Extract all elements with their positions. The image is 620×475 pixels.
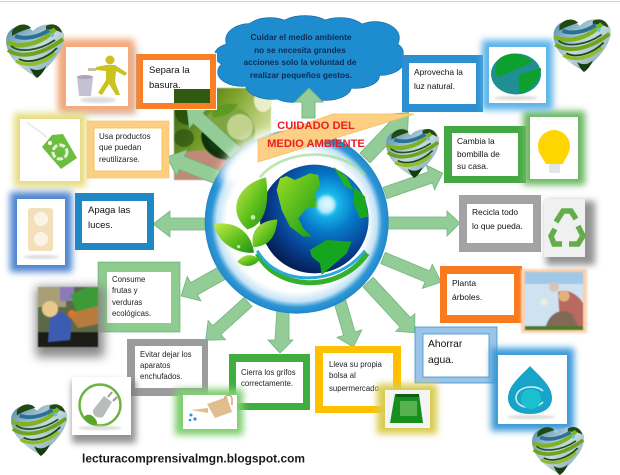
box: Evitar dejar aparatos: enchufados. bbox=[140, 372, 182, 381]
footer url: lecturacomprensivalmgn.blogspot.com bbox=[82, 452, 305, 466]
box: Cambia la bombilla: Cambia la bbox=[457, 136, 495, 146]
icon: plug bbox=[72, 377, 136, 443]
box: Cierra los grifos: correctamente. bbox=[241, 379, 293, 388]
box: Cambia la bombilla: su casa. bbox=[457, 161, 488, 171]
swoosh rings bbox=[260, 155, 365, 177]
globe bbox=[260, 165, 369, 273]
arrow to cloud bbox=[295, 88, 323, 118]
icon: shopping bag bbox=[377, 384, 437, 434]
top rule bbox=[0, 1, 620, 2]
photo: couple planting bbox=[521, 269, 587, 333]
arrow to Ahorrar agua bbox=[358, 273, 424, 342]
box: Planta arboles bbox=[440, 266, 522, 323]
arrow to Consume frutas bbox=[174, 261, 229, 308]
cloud text: acciones solo la voluntad de bbox=[244, 57, 357, 67]
arrows bbox=[153, 88, 460, 353]
box: Evitar dejar aparatos bbox=[127, 339, 208, 396]
arrow head over cloud bbox=[295, 88, 323, 118]
icon: wall outlet bbox=[10, 192, 72, 272]
box: Planta arboles: Planta bbox=[452, 278, 476, 288]
box: Lleva su propia bolsa: bolsa al bbox=[329, 371, 356, 380]
box: Aprovecha la luz: Aprovecha la bbox=[414, 67, 463, 77]
arrow to Evitar dejar bbox=[197, 292, 257, 350]
arrow to Cierra los grifos bbox=[268, 308, 293, 353]
box: Apaga las luces: luces. bbox=[88, 220, 113, 231]
box: Separa la basura bbox=[135, 53, 217, 110]
photo: child with vegetables bbox=[36, 287, 104, 357]
box: Separa la basura: basura. bbox=[149, 80, 181, 91]
banner ribbon bbox=[258, 114, 414, 162]
icon: recycle symbol bbox=[544, 199, 595, 265]
box: Aprovecha la luz bbox=[402, 55, 483, 112]
arrow to Apaga las luces bbox=[153, 211, 205, 237]
box: Apaga las luces: Apaga las bbox=[88, 205, 131, 216]
title: CUIDADO DEL bbox=[277, 120, 355, 132]
box: Consume frutas: ecológicas. bbox=[112, 309, 151, 318]
heart: bottom left bbox=[11, 404, 67, 456]
icon: recycle tag bbox=[14, 113, 86, 187]
box: Usa productos: reutilizarse. bbox=[99, 155, 140, 164]
heart: top left bbox=[6, 24, 64, 78]
box: Lleva su propia bolsa bbox=[315, 346, 401, 413]
heart: top right bbox=[554, 19, 611, 72]
heart: middle bbox=[386, 129, 439, 178]
arrow to Recicla todo bbox=[388, 211, 460, 236]
box: Evitar dejar aparatos: Evitar dejar los bbox=[140, 350, 192, 359]
box: Consume frutas: Consume bbox=[112, 275, 145, 284]
box: Aprovecha la luz: luz natural. bbox=[414, 81, 455, 91]
arrow to Separa la basura bbox=[178, 99, 244, 162]
cloud callout bbox=[215, 16, 403, 102]
arrow to Usa productos bbox=[162, 144, 222, 190]
box: Cierra los grifos bbox=[229, 354, 310, 410]
box: Recicla todo bbox=[459, 195, 541, 252]
box: Usa productos: Usa productos bbox=[99, 132, 151, 141]
arrow to Lleva su propia bolsa bbox=[328, 298, 366, 351]
icon: earth bbox=[482, 40, 553, 110]
arrow to Cambia la bombilla bbox=[381, 161, 447, 205]
box: Recicla todo: Recicla todo bbox=[472, 207, 518, 217]
box: Cambia la bombilla: bombilla de bbox=[457, 149, 500, 159]
box: Usa productos bbox=[87, 121, 169, 178]
box: Lleva su propia bolsa: Lleva su propia bbox=[329, 360, 383, 369]
box: Apaga las luces bbox=[75, 193, 154, 250]
box: Cambia la bombilla bbox=[444, 126, 526, 183]
cloud text: Cuidar el medio ambiente bbox=[251, 32, 352, 42]
title: MEDIO AMBIENTE bbox=[267, 138, 365, 150]
box: Lleva su propia bolsa: supermercado. bbox=[329, 384, 381, 393]
box: Consume frutas: verduras bbox=[112, 298, 142, 307]
box: Consume frutas: frutas y bbox=[112, 286, 138, 295]
icon: light bulb bbox=[523, 111, 585, 185]
box: Ahorrar agua: agua. bbox=[428, 355, 454, 366]
icon: watering can bbox=[175, 389, 243, 435]
box: Ahorrar agua: Ahorrar bbox=[428, 339, 463, 350]
central globe emblem bbox=[205, 123, 389, 314]
cloud text: realizar pequeños gestos. bbox=[250, 70, 352, 80]
box: Separa la basura: Separa la bbox=[149, 65, 190, 76]
cloud text: no se necesita grandes bbox=[254, 45, 346, 55]
box: Usa productos: que puedan bbox=[99, 143, 141, 152]
icon: trash bbox=[58, 39, 136, 114]
box: Planta arboles: árboles. bbox=[452, 292, 482, 302]
box: Consume frutas bbox=[98, 262, 180, 332]
heart: bottom right bbox=[532, 427, 584, 475]
box: Cierra los grifos: Cierra los grifos bbox=[241, 368, 296, 377]
box: Ahorrar agua bbox=[415, 327, 497, 383]
leaves bbox=[236, 177, 267, 229]
arrow to Planta arboles bbox=[378, 246, 446, 294]
icon: water drop bbox=[491, 348, 574, 431]
arrow to Aprovecha la luz bbox=[356, 103, 418, 167]
continents bbox=[277, 173, 320, 237]
photo: hand holding globe bbox=[174, 88, 272, 180]
box: Recicla todo: lo que pueda. bbox=[472, 221, 523, 231]
box: Evitar dejar aparatos: aparatos bbox=[140, 361, 170, 370]
